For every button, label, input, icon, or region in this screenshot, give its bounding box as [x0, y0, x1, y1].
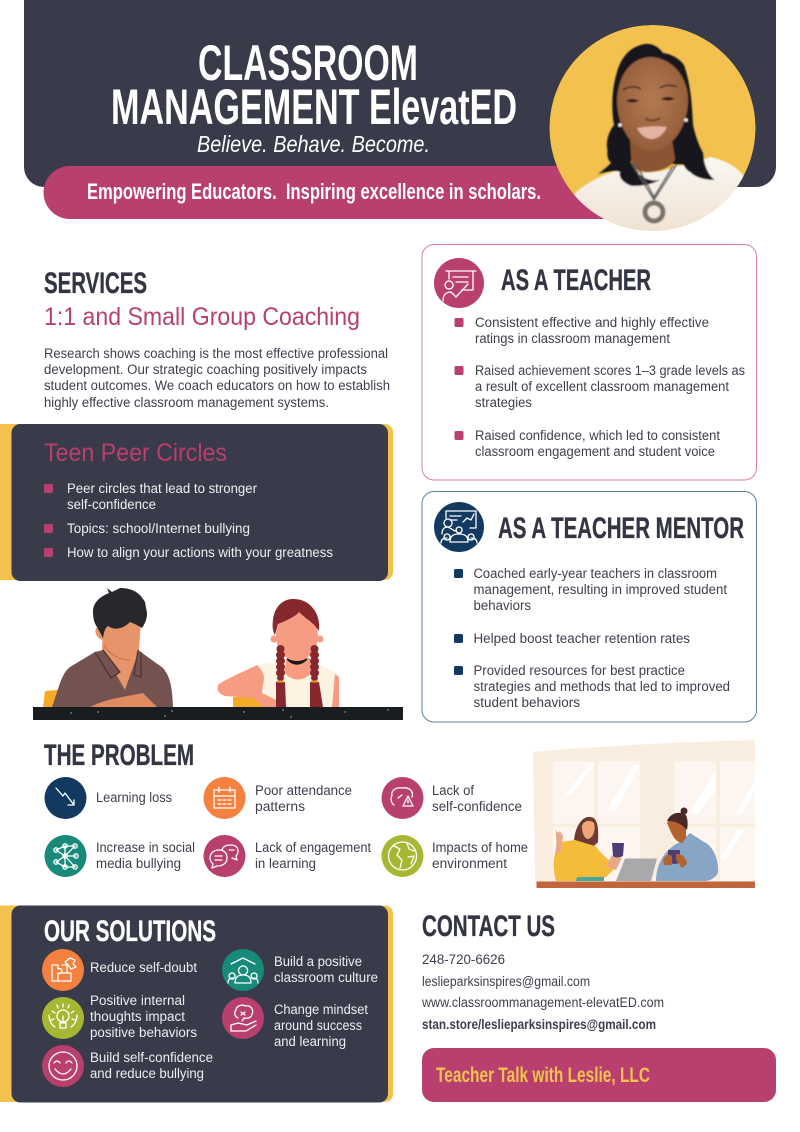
item: learning loss: Learning loss	[96, 790, 172, 805]
item: social media bullying	[44, 835, 195, 877]
services heading: SERVICES	[44, 267, 147, 300]
services paragraph: highly effective classroom management systems.	[44, 395, 329, 410]
contact button	[422, 1048, 776, 1102]
header banner	[24, 0, 776, 219]
portrait	[550, 25, 765, 240]
teacher bullet list: ratings in classroom management	[475, 331, 670, 346]
item: social media bullying: media bullying	[96, 856, 181, 871]
item: build self-confidence: Build self-confidence	[90, 1050, 213, 1065]
teacher bullet list: Raised achievement scores 1–3 grade levels as	[475, 363, 745, 378]
teen heading: Teen Peer Circles	[44, 439, 227, 467]
item: positive thoughts: thoughts impact	[90, 1009, 185, 1024]
teen bullet list: self-confidence	[67, 497, 156, 512]
panel: as a teacher mentor	[422, 492, 756, 722]
item: poor attendance	[204, 777, 352, 819]
item: poor attendance: patterns	[255, 799, 305, 814]
contact details: 248-720-6626	[422, 952, 505, 967]
mentor bullet list: Helped boost teacher retention rates	[474, 631, 690, 646]
item: home environment: Impacts of home	[432, 840, 528, 855]
teacher bullet list: strategies	[475, 395, 532, 410]
teen bullet list: Peer circles that lead to stronger	[67, 481, 257, 496]
item: build self-confidence	[42, 1045, 213, 1087]
icon: mentor with group	[434, 502, 484, 552]
services paragraph	[44, 346, 390, 410]
tagline: Believe. Behave. Become.	[197, 131, 430, 157]
item: lack of self-confidence	[382, 777, 522, 819]
illustration: two adults at a window table	[533, 740, 755, 888]
teacher bullet list	[454, 315, 745, 459]
teacher bullet list: a result of excellent classroom management	[475, 379, 729, 394]
section: the problem	[44, 739, 528, 877]
item: home environment	[382, 835, 528, 877]
item: poor attendance: Poor attendance	[255, 783, 352, 798]
teacher heading: AS A TEACHER	[501, 264, 651, 297]
icon: teacher at board	[434, 258, 484, 308]
item: change mindset: Change mindset	[274, 1002, 368, 1017]
services paragraph: Research shows coaching is the most effective professional	[44, 346, 388, 361]
contact button: Teacher Talk with Leslie, LLC	[436, 1064, 650, 1087]
panel: as a teacher	[422, 244, 756, 480]
item: home environment: environment	[432, 856, 507, 871]
item: positive classroom culture	[222, 949, 378, 991]
mentor bullet list: student behaviors	[474, 695, 580, 710]
panel: our solutions	[0, 906, 393, 1102]
services subheading: 1:1 and Small Group Coaching	[44, 303, 360, 331]
item: reduce self-doubt: Reduce self-doubt	[90, 960, 197, 975]
teen bullet list	[44, 481, 333, 560]
item: positive thoughts: Positive internal	[90, 993, 185, 1008]
item: positive classroom culture: classroom culture	[274, 970, 378, 985]
teacher bullet list: Consistent effective and highly effective	[475, 315, 709, 330]
services paragraph: student outcomes. We coach educators on how to establish	[44, 378, 390, 393]
item: change mindset	[222, 997, 368, 1049]
item: change mindset: and learning	[274, 1034, 346, 1049]
contact details	[421, 952, 664, 1032]
item: lack of self-confidence: Lack of	[432, 783, 474, 798]
panel: teen peer circles	[0, 424, 393, 581]
services section	[44, 267, 390, 410]
services paragraph: development. Our strategic coaching positively impacts	[44, 362, 367, 377]
item: social media bullying: Increase in social	[96, 840, 195, 855]
item: learning loss	[44, 777, 172, 819]
contact details: stan.store/leslieparksinspires@gmail.com	[422, 1017, 656, 1032]
solutions heading: OUR SOLUTIONS	[44, 915, 216, 948]
mentor bullet list	[454, 566, 730, 710]
item: reduce self-doubt	[42, 949, 197, 991]
illustration: two students at a desk	[33, 588, 403, 720]
item: change mindset: around success	[274, 1018, 362, 1033]
title: MANAGEMENT ElevatED	[111, 79, 517, 135]
mentor bullet list: behaviors	[474, 598, 531, 613]
title: CLASSROOM	[198, 35, 418, 91]
contact details: leslieparksinspires@gmail.com	[422, 974, 590, 989]
title	[111, 35, 517, 135]
item: lack of engagement	[204, 835, 371, 877]
item: lack of engagement: Lack of engagement	[255, 840, 371, 855]
item: positive classroom culture: Build a positive	[274, 954, 362, 969]
contact heading: CONTACT US	[422, 910, 555, 943]
mentor bullet list: Coached early-year teachers in classroom	[474, 566, 717, 581]
mentor bullet list: management, resulting in improved student	[474, 582, 727, 597]
item: lack of self-confidence: self-confidence	[432, 799, 522, 814]
teen bullet list: Topics: school/Internet bullying	[67, 521, 250, 536]
mentor bullet list: Provided resources for best practice	[474, 663, 685, 678]
problem heading: THE PROBLEM	[44, 739, 194, 772]
ribbon: Empowering Educators. Inspiring excellence in scholars.	[87, 179, 541, 204]
teacher bullet list: Raised confidence, which led to consistent	[475, 428, 720, 443]
item: positive thoughts: positive behaviors	[90, 1025, 197, 1040]
mentor bullet list: strategies and methods that led to improved	[474, 679, 730, 694]
item: positive thoughts	[42, 993, 197, 1040]
item: build self-confidence: and reduce bullying	[90, 1066, 204, 1081]
ribbon	[44, 166, 620, 219]
item: lack of engagement: in learning	[255, 856, 316, 871]
contact details: www.classroommanagement-elevatED.com	[421, 995, 664, 1010]
section: contact us	[421, 910, 776, 1102]
teacher bullet list: classroom engagement and student voice	[475, 444, 715, 459]
teen bullet list: How to align your actions with your greatness	[67, 545, 333, 560]
